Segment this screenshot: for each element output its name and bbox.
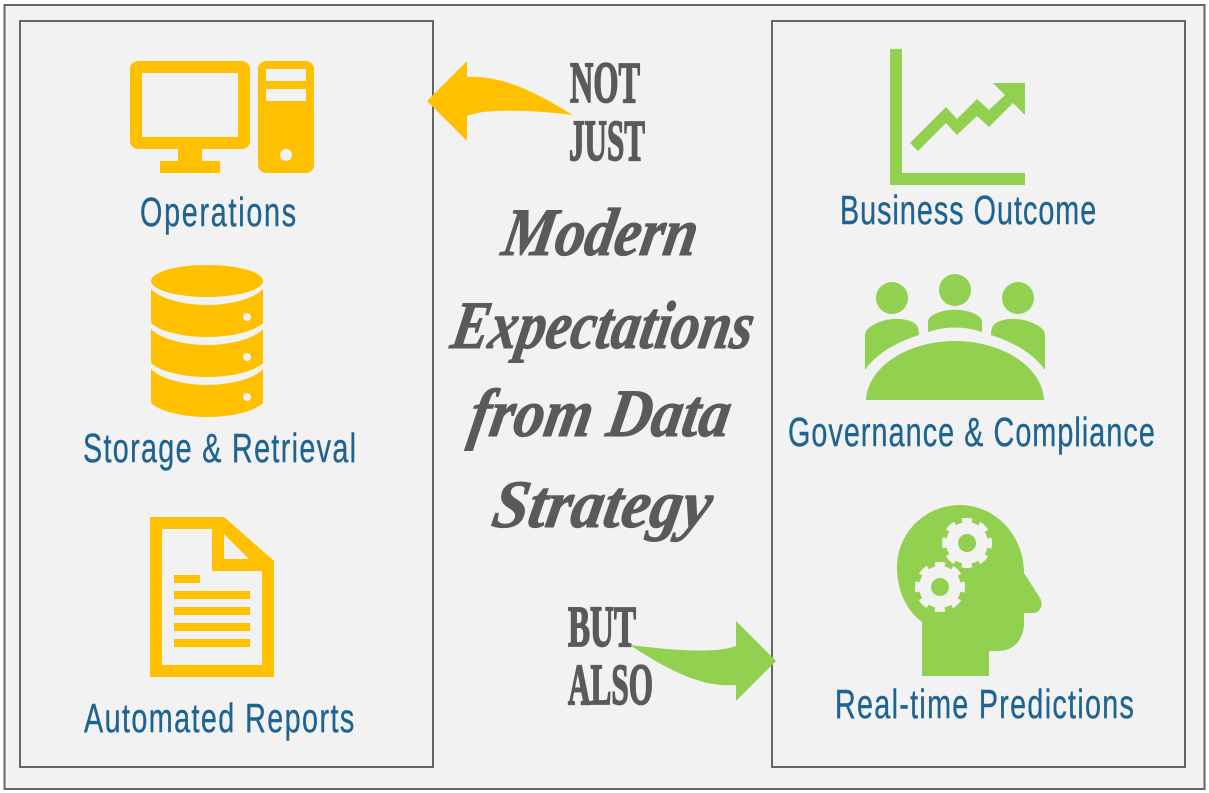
arrow: yellow pointing left <box>427 61 573 141</box>
label: Automated Reports: Automated Reports <box>84 696 354 741</box>
title: Modern Expectations from Data Strategy <box>446 194 761 542</box>
icon: document <box>150 517 274 677</box>
label: Business Outcome: Business Outcome <box>840 188 1096 233</box>
heading: ALSO: ALSO <box>568 652 653 717</box>
label: Real-time Predictions: Real-time Predictions <box>835 682 1134 727</box>
label: Operations: Operations <box>140 190 296 235</box>
title: Modern Expectations from Data Strategy: from Data <box>464 375 738 451</box>
arrow: green pointing right <box>630 621 776 701</box>
icon: growth chart <box>890 49 1025 185</box>
title: Modern Expectations from Data Strategy: Modern <box>497 194 705 270</box>
icon: computer <box>130 61 314 173</box>
panel: right, additional expectations <box>772 21 1185 767</box>
label: Governance & Compliance: Governance & Compliance <box>788 410 1155 455</box>
icon: database <box>151 265 263 417</box>
heading: NOT: NOT <box>570 50 640 115</box>
icon: head with gears <box>897 505 1042 676</box>
heading: BUT: BUT <box>568 594 636 659</box>
panel: left, current capabilities <box>20 21 433 767</box>
icon: meeting table <box>865 274 1045 400</box>
title: Modern Expectations from Data Strategy: Strategy <box>487 466 719 542</box>
title: Modern Expectations from Data Strategy: Expectations <box>446 287 761 363</box>
label: Storage & Retrieval: Storage & Retrieval <box>83 426 356 471</box>
heading: JUST: JUST <box>569 108 645 173</box>
